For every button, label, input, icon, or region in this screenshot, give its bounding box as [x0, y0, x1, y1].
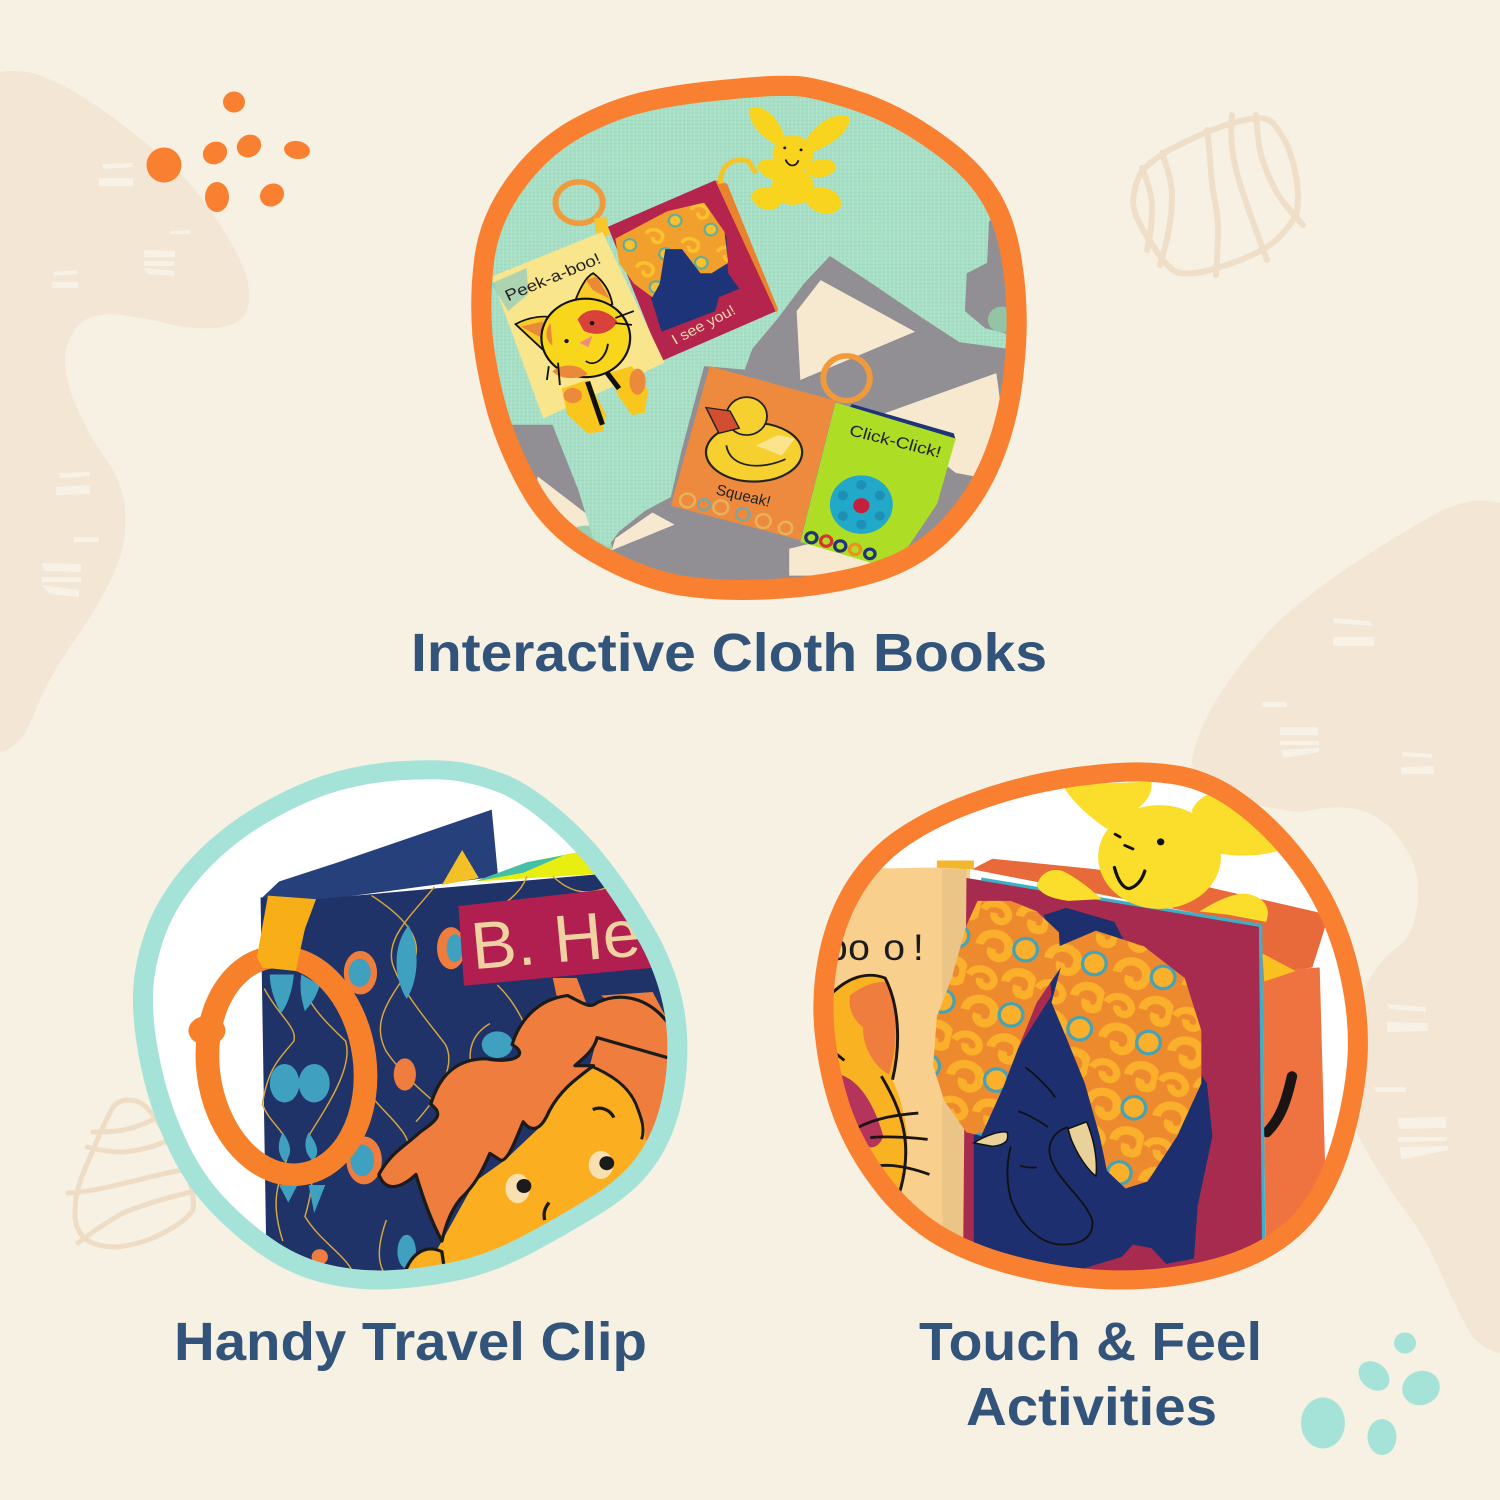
heading: touch and feel activities — [919, 1312, 1262, 1437]
heading: handy travel clip: Handy Travel Clip — [174, 1312, 647, 1372]
photo: peek-a-boo cloth book: Peek-a-boo! — [502, 250, 604, 305]
photo: orange ring — [188, 948, 378, 1183]
photo: orange book pages — [936, 858, 1325, 1237]
photo: back cover and inner pages — [262, 810, 618, 901]
icon: sketched shell bottom left — [68, 1100, 200, 1247]
photo: crimson page — [963, 878, 1264, 1300]
photo: left peach page: boo! — [826, 927, 924, 969]
photo: navy elephant — [974, 908, 1212, 1273]
photo: name label: B. Hea — [468, 892, 682, 984]
photo: white background — [882, 782, 1348, 1237]
photo: squeak cloth book: Squeak! — [714, 482, 772, 511]
panel: handy travel clip — [120, 750, 700, 1300]
background blob right — [1192, 501, 1500, 1353]
icon: sketched shell top right — [1133, 115, 1303, 275]
background blob left — [0, 71, 249, 752]
heading: touch and feel activities: Activities — [966, 1377, 1217, 1437]
photo: yellow strap — [257, 896, 316, 971]
photo: yellow bunny — [1037, 782, 1288, 922]
panel: touch and feel activities — [800, 750, 1380, 1300]
photo: grey rug — [512, 220, 1007, 580]
icon: orange dots — [142, 92, 311, 212]
photo: mint blanket — [491, 96, 1006, 547]
photo: peek-a-boo cloth book: I see you! — [669, 302, 739, 348]
photo: left peach page — [833, 868, 970, 1238]
heading: touch and feel activities: Touch & Feel — [919, 1312, 1262, 1372]
photo: elephant ears — [933, 901, 1201, 1188]
heading: interactive cloth books: Interactive Cloth Books — [411, 623, 1047, 683]
photo: yellow bunny — [721, 107, 849, 214]
photo: navy book cover — [260, 874, 665, 1270]
photo: squeak cloth book: Click-Click! — [847, 422, 943, 462]
photo: peek-a-boo cloth book — [491, 180, 778, 433]
photo: illustrated lion — [377, 978, 668, 1270]
panel: interactive cloth books — [460, 70, 1040, 610]
icon: teal dots — [1301, 1332, 1445, 1455]
photo: white background — [153, 779, 594, 1234]
photo: squeak cloth book — [671, 356, 956, 569]
